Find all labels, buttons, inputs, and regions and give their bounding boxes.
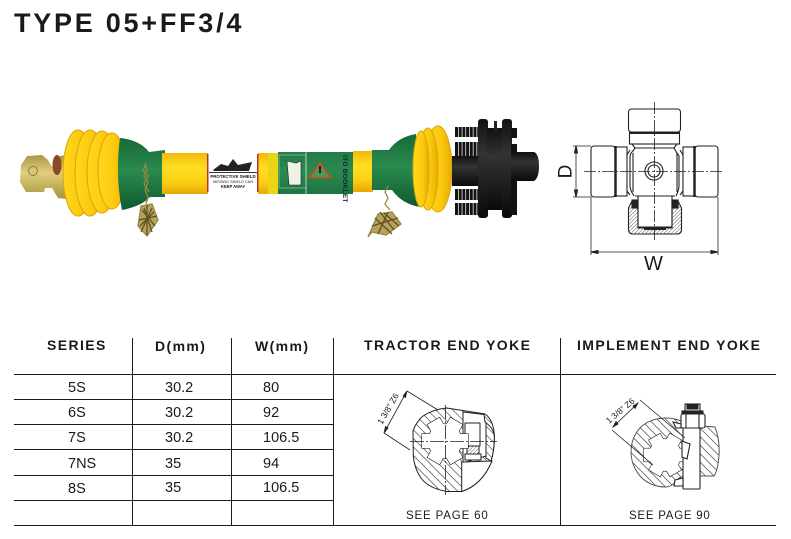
- left safety chain: [138, 163, 158, 236]
- left green guard cone: [118, 138, 165, 210]
- W dimension: [591, 197, 718, 275]
- tractor end yoke drawing: [375, 391, 497, 522]
- D column: 35: [165, 456, 181, 472]
- lower-right cutaway blank face: [462, 461, 492, 492]
- safety label: MISSING SHIELD CAN: [213, 180, 253, 184]
- top bearing cup: [628, 109, 680, 148]
- column headers: W(mm): [255, 338, 309, 354]
- column headers: SERIES: [47, 337, 107, 353]
- W column: 80: [263, 380, 279, 396]
- D column: 30.2: [165, 430, 193, 446]
- bottom sectioned cup: [628, 196, 682, 234]
- series column: 7NS: [68, 456, 96, 472]
- cross body: [630, 148, 679, 196]
- safety label: KEEP AWAY: [221, 184, 245, 189]
- yellow band and green warning sleeve: ITO BOOKLET: [341, 155, 348, 203]
- yellow tube right section: [353, 151, 373, 192]
- page reference: SEE PAGE 60: [406, 510, 489, 522]
- W column: 92: [263, 405, 279, 421]
- column headers: [47, 337, 761, 354]
- series column: [68, 380, 96, 497]
- center lines: [410, 405, 497, 495]
- safety label: PROTECTIVE SHIELD: [210, 174, 256, 179]
- right safety chain: [368, 186, 401, 237]
- clamp bolt and nut: [673, 404, 705, 489]
- W column: [263, 380, 299, 496]
- D column: 35: [165, 480, 181, 496]
- series column: 8S: [68, 481, 86, 497]
- series column: 5S: [68, 380, 86, 396]
- splined bore: [644, 434, 686, 476]
- W column: 94: [263, 456, 279, 472]
- D column: 30.2: [165, 380, 193, 396]
- tractor-end gold yoke: [20, 155, 66, 199]
- series column: 7S: [68, 430, 86, 446]
- page reference: SEE PAGE 90: [629, 510, 711, 522]
- series column: 6S: [68, 405, 86, 421]
- spline dimension: 1 3/8" Z6: [375, 391, 401, 426]
- yellow band and green warning sleeve: [268, 152, 353, 203]
- column headers: IMPLEMENT END YOKE: [577, 337, 761, 353]
- column headers: D(mm): [155, 338, 206, 354]
- universal joint cross diagram: [556, 102, 723, 275]
- D dimension: D: [556, 165, 576, 178]
- center lines: [584, 102, 723, 240]
- bolt bore: [463, 412, 494, 462]
- implement end yoke drawing: [604, 396, 719, 522]
- right yellow bellows: [413, 126, 452, 212]
- left bearing cup: [591, 146, 630, 197]
- safety label: [207, 153, 258, 194]
- yoke body outline: [413, 408, 494, 492]
- right bearing cup: [680, 146, 718, 197]
- black friction clutch: [452, 119, 539, 218]
- W column: 106.5: [263, 430, 299, 446]
- W dimension: W: [644, 253, 663, 275]
- splined bore: [422, 418, 468, 464]
- right green guard cone: [372, 134, 420, 207]
- spline dimension: 1 3/8" Z6: [604, 396, 637, 426]
- left yellow bellows: [63, 130, 126, 216]
- D column: [165, 380, 193, 496]
- yoke body: [631, 418, 719, 487]
- D column: 30.2: [165, 405, 193, 421]
- W column: 106.5: [263, 480, 299, 496]
- specification table: [14, 337, 776, 526]
- yellow tube: [162, 153, 270, 194]
- PTO drive shaft photo: [20, 119, 539, 237]
- table grid: [14, 338, 776, 526]
- D dimension: [556, 146, 591, 197]
- title: TYPE 05+FF3/4: [14, 8, 244, 38]
- column headers: TRACTOR END YOKE: [364, 337, 531, 353]
